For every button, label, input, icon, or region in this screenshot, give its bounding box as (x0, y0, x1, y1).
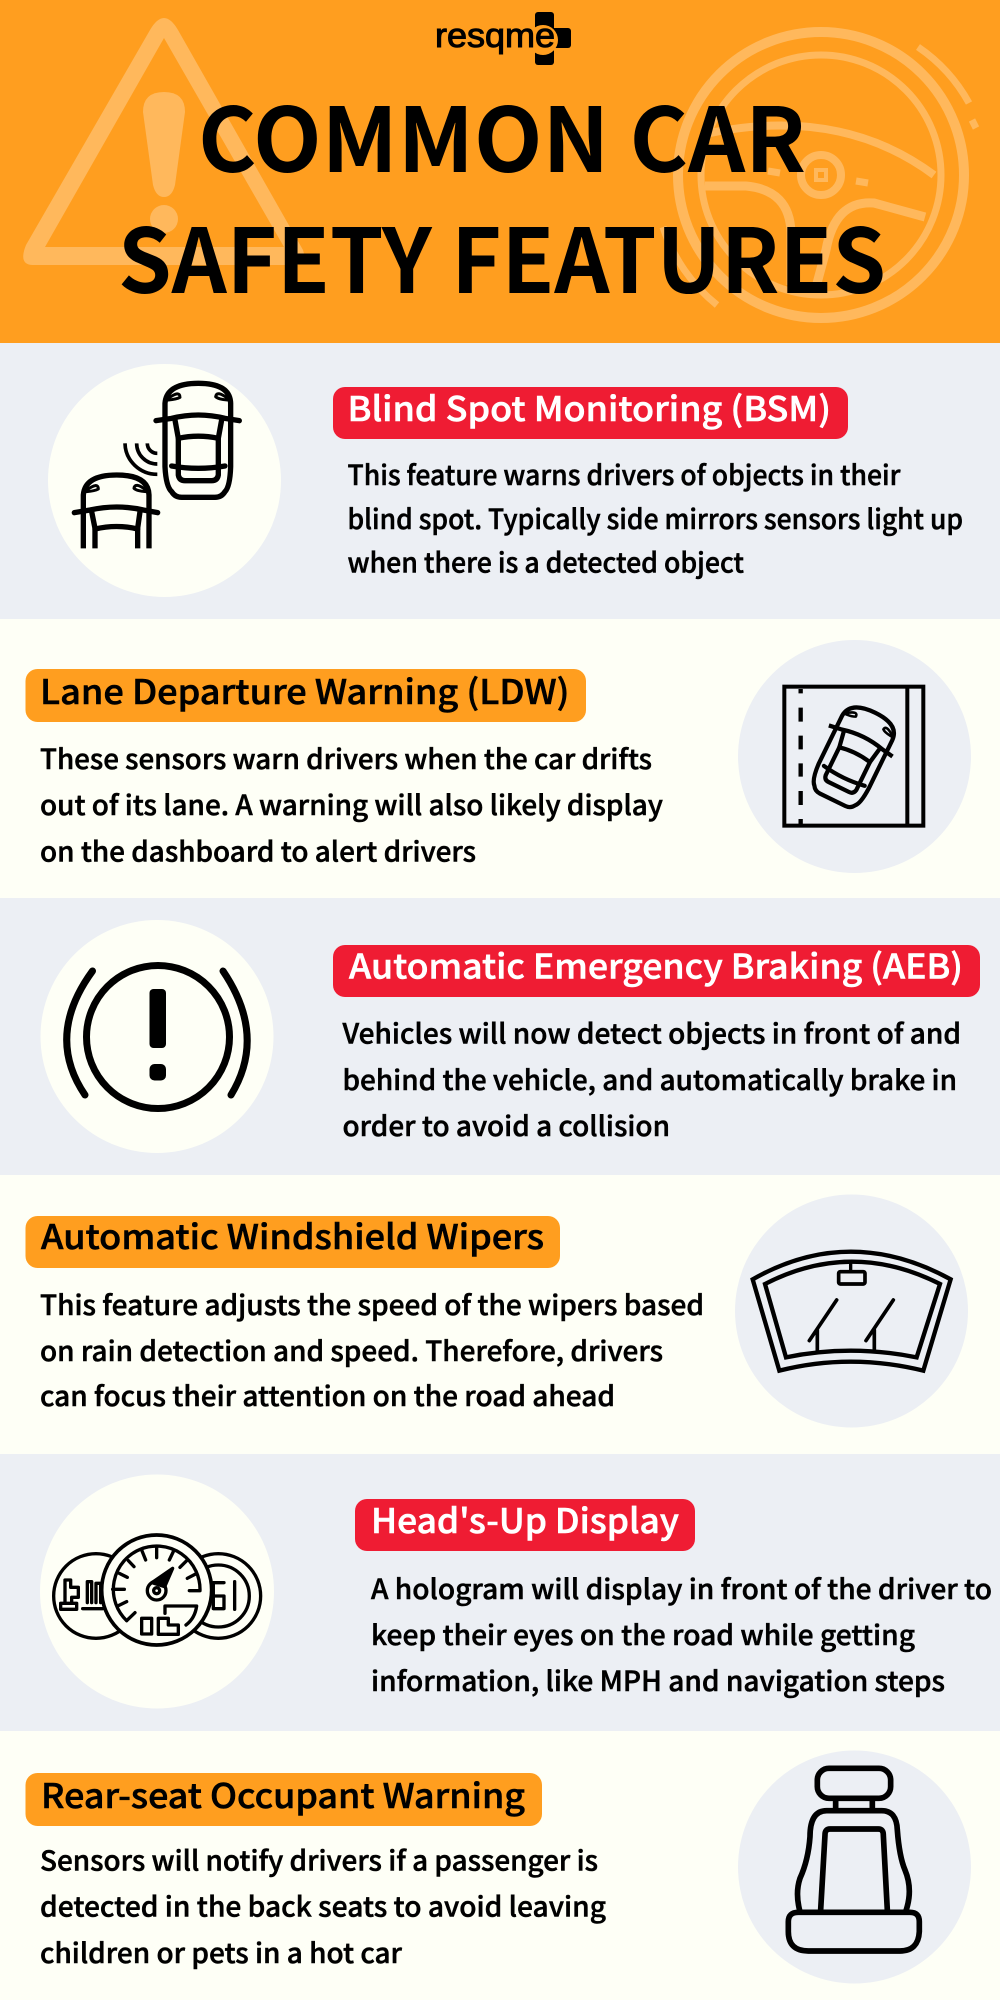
text: rear-seat description: Sensors will notify drivers if a passenger is (40, 1838, 598, 1878)
text: rear-seat description (40, 1838, 606, 1971)
heading pill: rear-seat: Rear-seat Occupant Warning (41, 1769, 525, 1818)
icon: two cars with sensor waves (48, 364, 281, 597)
icon: windshield with wipers (735, 1194, 968, 1428)
icon: car seat (738, 1750, 971, 1984)
text: wipers description: can focus their attention on the road ahead (40, 1374, 615, 1414)
panel: automatic windshield wipers (0, 1175, 1000, 1454)
text: BSM description: This feature warns drivers of objects in their (348, 453, 901, 493)
panel: head's-up display (0, 1454, 1000, 1731)
panel: rear-seat occupant warning (0, 1731, 1000, 2000)
title: SAFETY FEATURES (118, 190, 886, 319)
panel: blind spot monitoring (0, 343, 1000, 619)
text: LDW description (40, 737, 663, 870)
text: BSM description (348, 453, 963, 580)
text: HUD description (371, 1567, 992, 1699)
header panel (0, 0, 1000, 343)
logo: resqme (435, 12, 571, 65)
text: AEB description (341, 1012, 961, 1144)
heading pill: BSM: Blind Spot Monitoring (BSM) (348, 382, 831, 431)
text: AEB description: Vehicles will now detect objects in front of and (341, 1012, 961, 1052)
text: HUD description: keep their eyes on the road while getting (371, 1613, 915, 1653)
icon: dashboard gauges (40, 1474, 274, 1708)
text: BSM description: when there is a detected object (348, 540, 744, 580)
text: LDW description: on the dashboard to alert drivers (40, 830, 476, 870)
text: rear-seat description: children or pets in a hot car (40, 1931, 403, 1971)
heading pill: AEB: Automatic Emergency Braking (AEB) (349, 940, 963, 988)
title: COMMON CAR (198, 69, 806, 198)
icon: car drifting across lane (738, 640, 971, 873)
text: wipers description (40, 1283, 704, 1414)
logo: resqme: resqme (435, 17, 555, 55)
icon: brake warning light (40, 920, 274, 1153)
text: wipers description: on rain detection and speed. Therefore, drivers (40, 1329, 663, 1369)
heading pill: LDW: Lane Departure Warning (LDW) (40, 665, 570, 714)
panel: automatic emergency braking (0, 898, 1000, 1175)
text: LDW description: These sensors warn drivers when the car drifts (40, 737, 652, 777)
text: AEB description: behind the vehicle, and automatically brake in (342, 1058, 957, 1098)
text: AEB description: order to avoid a collision (342, 1104, 670, 1144)
icon: steering wheel watermark (663, 32, 976, 318)
heading pill: wipers: Automatic Windshield Wipers (41, 1210, 544, 1259)
text: BSM description: blind spot. Typically side mirrors sensors light up (348, 497, 963, 537)
text: HUD description: information, like MPH and navigation steps (371, 1659, 945, 1699)
icon: warning triangle watermark (23, 18, 304, 265)
text: LDW description: out of its lane. A warning will also likely display (40, 783, 663, 823)
text: HUD description: A hologram will display in front of the driver to (371, 1567, 992, 1607)
text: rear-seat description: detected in the back seats to avoid leaving (40, 1884, 606, 1924)
title (118, 69, 886, 319)
heading pill: HUD: Head's-Up Display (371, 1494, 680, 1543)
text: wipers description: This feature adjusts the speed of the wipers based (40, 1283, 704, 1323)
panel: lane departure warning (0, 619, 1000, 898)
